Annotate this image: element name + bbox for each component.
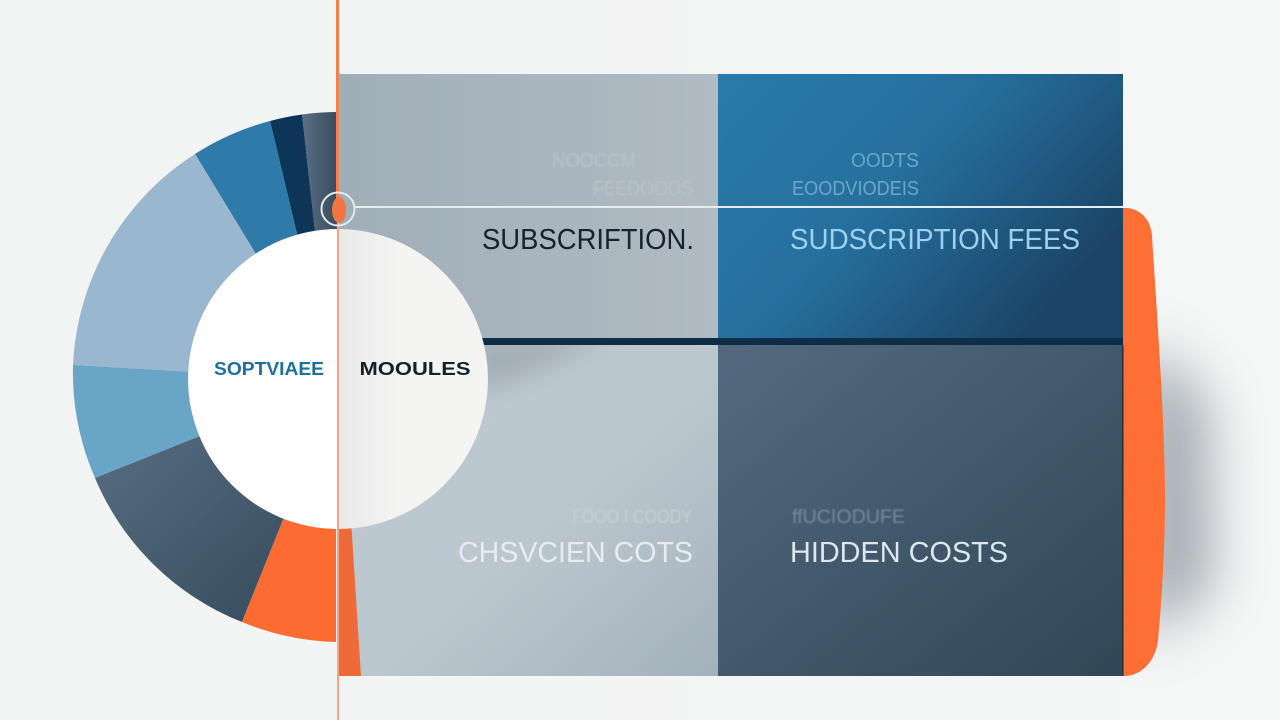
heading: subscription fees: SUDSCRIPTION FEES [790,224,1080,256]
segment: sky blue [73,365,205,478]
panel: top left grey [338,74,718,340]
panel divider shadow [480,338,1123,345]
heading: top left faint text [552,150,693,200]
right edge line [1122,345,1124,676]
segment: orange [242,490,336,642]
circle right half [338,229,488,529]
lower right faint text: ffUCIODUFE [792,507,905,528]
heading: lower left costs: CHSVCIEN COTS [458,537,693,569]
faint line 1: NOOCCM [552,150,636,172]
vertical orange line upper [336,0,339,210]
faint line 1: OODTS [851,150,919,172]
lower panel inner shading [484,345,589,394]
connector node [322,192,354,226]
segment: slate [95,434,295,622]
faint line 2: FEEDOOOS [593,178,693,200]
panel: lower left [338,344,718,676]
orange side panel [1120,208,1165,676]
label: modules: MOOULES [360,358,470,379]
panel: hidden costs [718,344,1123,676]
label: software: SOPTVIAEE [214,358,324,379]
node ring [322,192,354,226]
heading: hidden costs: HIDDEN COSTS [790,537,1008,569]
centre circle [188,229,488,529]
segment: blue [195,121,298,264]
orange wedge [338,520,361,676]
panel: subscription fees [718,74,1123,340]
segment: pale blue [73,154,262,372]
heading: subscription: SUBSCRIFTION. [482,224,694,256]
vertical orange line lower [337,210,339,720]
node fill [332,197,346,223]
faint line 2: EOODVIODEIS [792,178,919,200]
heading: top right faint text [792,150,919,200]
circle left half [188,229,338,529]
connector line [355,206,1123,208]
panel shadow [1140,340,1210,640]
donut chart [73,112,338,642]
lower left faint text: FOOO I COODY [572,507,692,528]
segment: grey top [302,112,338,232]
segment: navy [270,114,315,238]
